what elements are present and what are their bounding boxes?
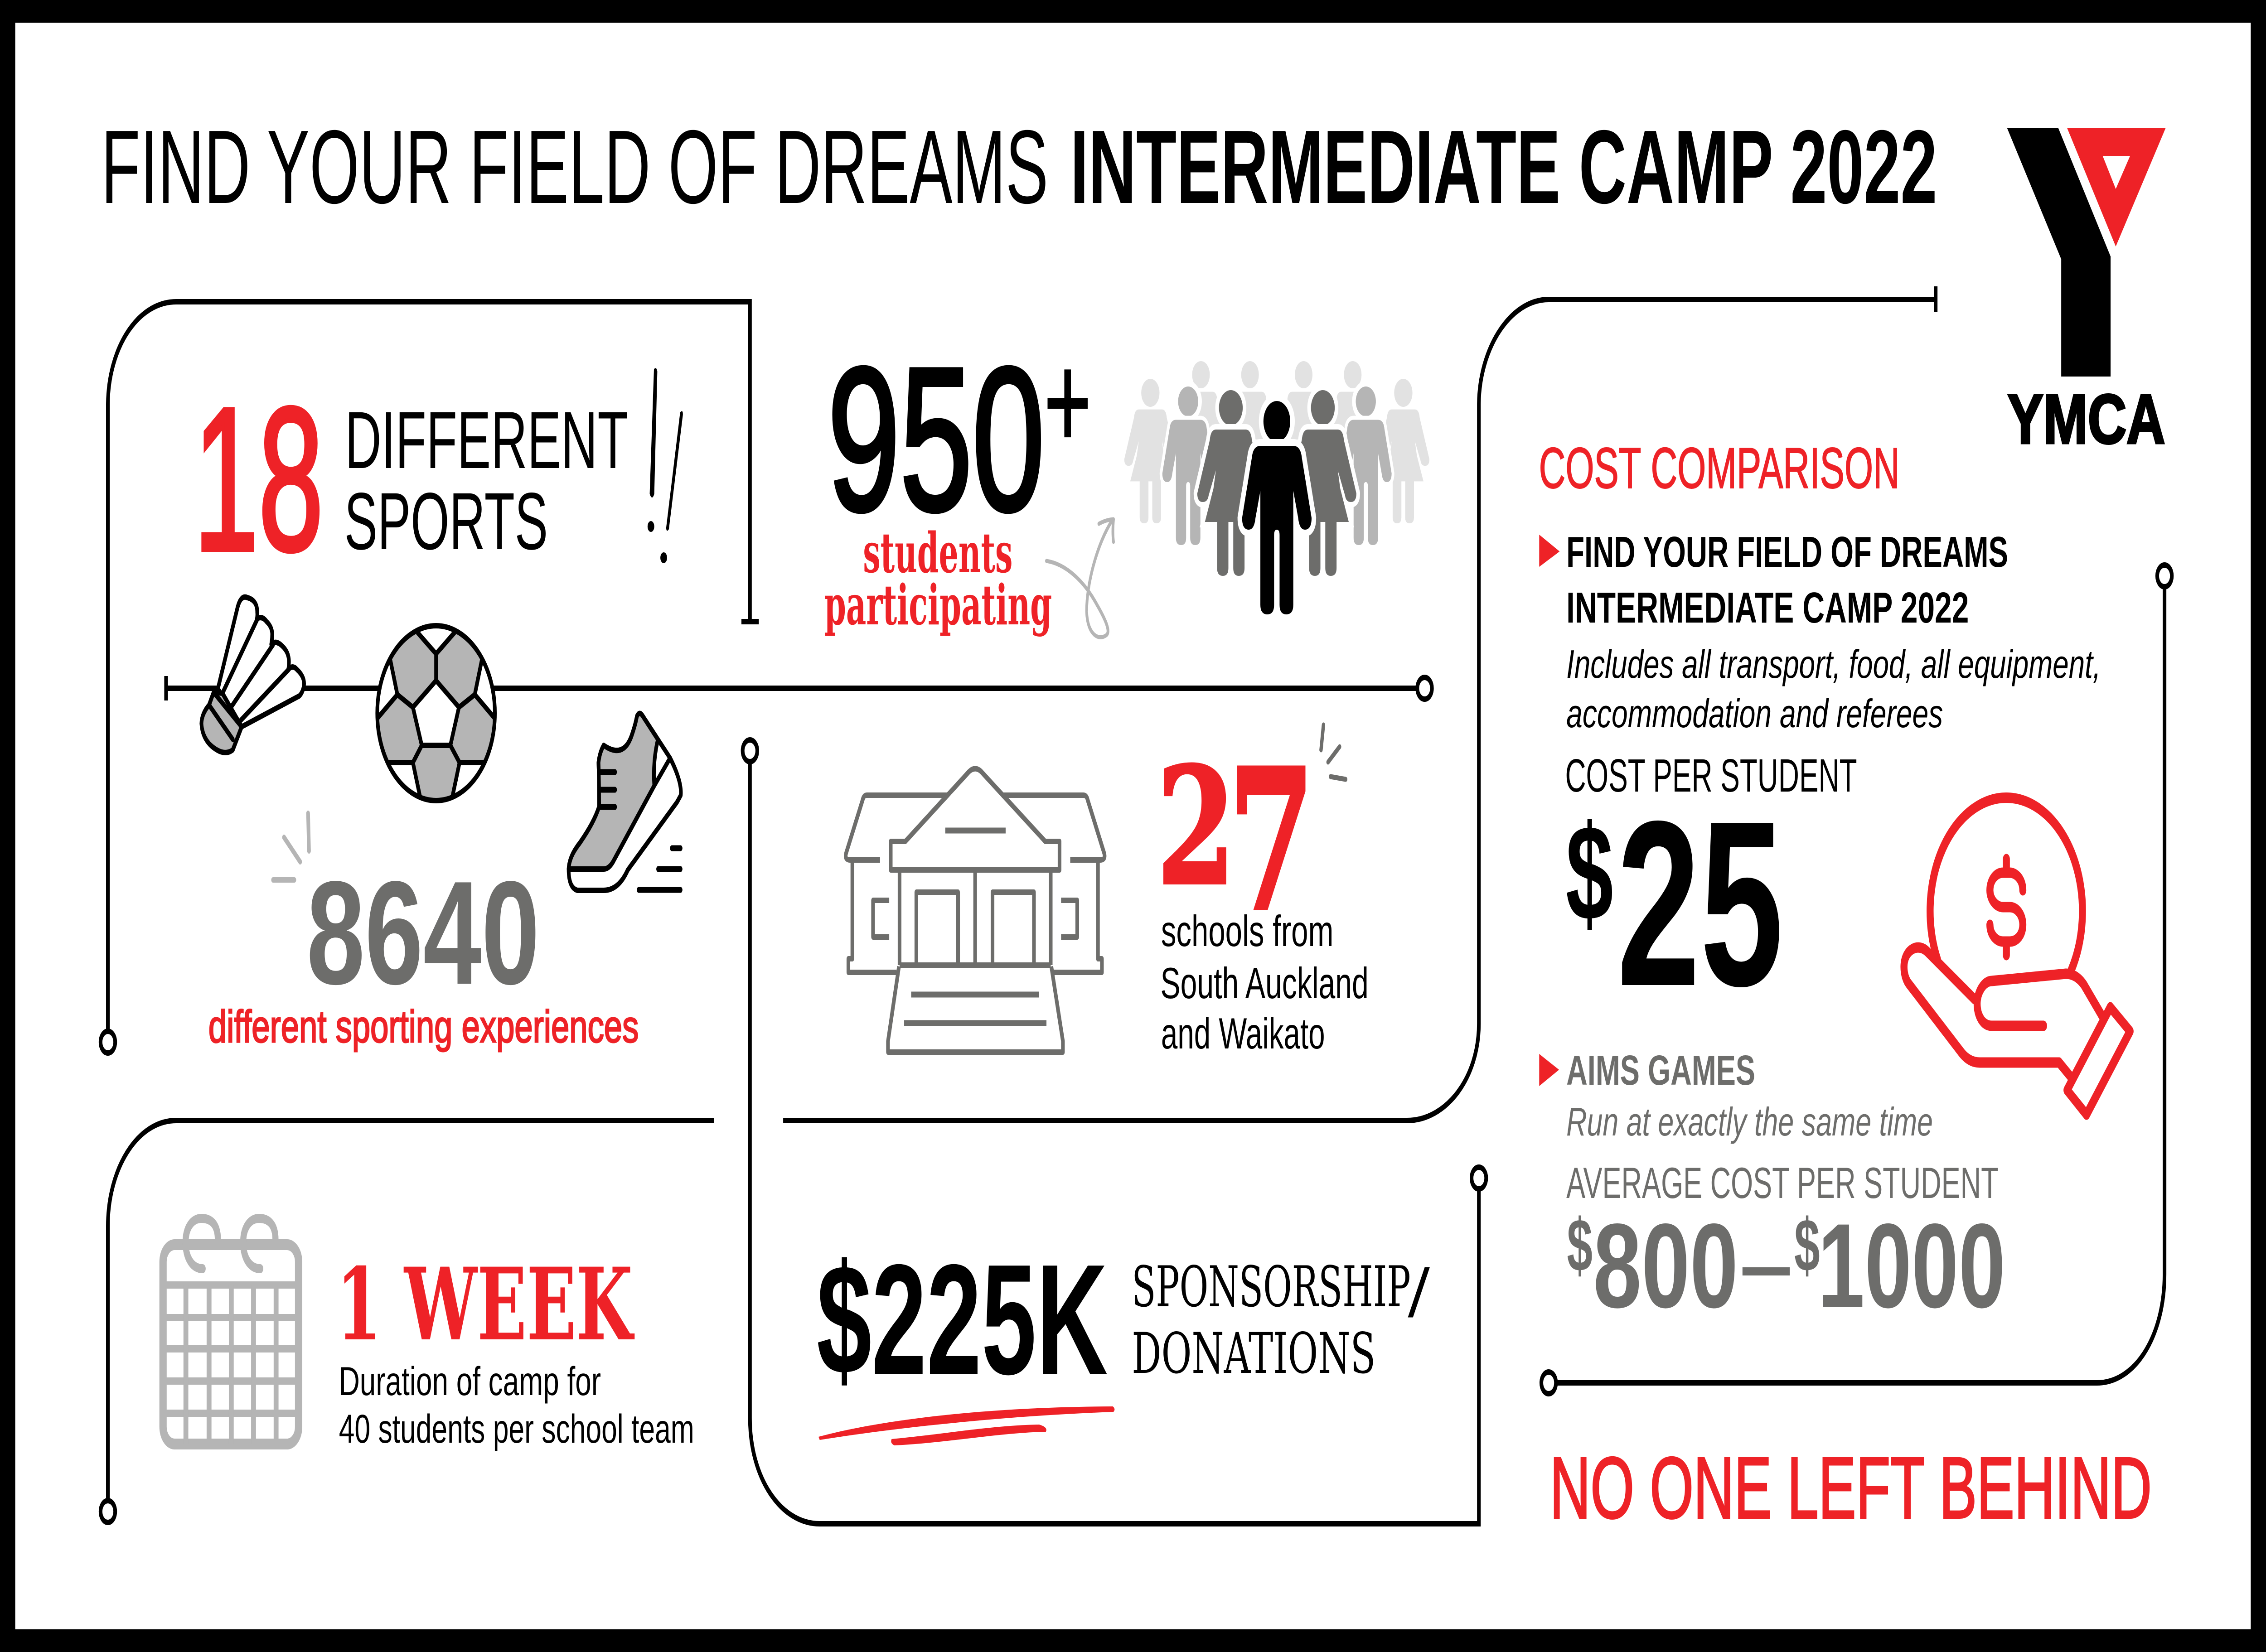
accent: red underline [818,1406,1114,1445]
stat: 1 week: Duration of camp for [339,1359,601,1404]
icon: hand drawn exclamation marks [648,368,683,563]
stat: 1 week: 40 students per school team [339,1406,694,1452]
connector: cost panel [1541,565,2172,1394]
connector: bottom left frame [101,1121,714,1522]
mid men [1162,386,1392,545]
stat: 1 week: 1 WEEK [336,1246,635,1363]
stat: 27 schools: schools from [1161,906,1333,956]
stat: 950+ students: participating [824,572,1052,638]
block: camp cost: accommodation and referees [1566,691,1943,736]
block: AIMS games cost: 1000 [1818,1199,2005,1333]
title: INTERMEDIATE CAMP 2022 [1070,108,1937,225]
stat: 27 schools: 2 [1157,733,1235,921]
icon: hand holding coin [1904,798,2130,1115]
stat: 18 different sports: SPORTS [344,476,548,567]
icon: soccer ball [375,623,497,803]
marker: red triangle [1539,535,1559,567]
block: AIMS games cost: AVERAGE COST PER STUDENT [1566,1158,1999,1208]
block: AIMS games cost: AIMS GAMES [1566,1047,1755,1094]
icon: running shoe [569,714,681,890]
block: AIMS games cost [1539,1047,2005,1333]
stat: 950+ students: students [863,520,1012,585]
dark women [1197,390,1356,576]
stat: 18 different sports: DIFFERENT [345,395,628,486]
stat: 8640 sporting experiences: different sporting experiences [208,1002,639,1052]
front man [1242,401,1312,614]
slogan: no one left behind: NO ONE LEFT BEHIND [1550,1439,2152,1536]
outer women [1124,379,1429,523]
stat: 950+ students [824,326,1091,638]
accent: sparks by 8640 [273,813,309,880]
stat: 8640 sporting experiences [208,850,639,1052]
stat: 950+ students: + [1044,326,1091,478]
stat: 27 schools: South Auckland [1161,958,1369,1008]
marker: red triangle [1539,1054,1559,1086]
stat: 18 different sports: 18 [194,366,323,593]
stat: 8640 sporting experiences: 8640 [306,850,540,1015]
label: sponsorship donations [1132,1254,1430,1386]
stat: 950+ students: 950 [828,326,1045,553]
block: AIMS games cost: $ [1567,1203,1593,1287]
icon: shuttlecock [201,597,304,753]
heading: cost comparison: COST COMPARISON [1539,436,1900,500]
connector: top left frame [101,302,759,1053]
block: camp cost [1539,528,2101,1035]
back row figures [1175,361,1379,506]
stat: 27 schools: 7 [1228,726,1315,955]
stat: 27 schools [1157,726,1369,1058]
label: sponsorship donations: / [1408,1256,1430,1327]
title: FIND YOUR FIELD OF DREAMS [101,108,1048,225]
block: camp cost: 25 [1617,772,1783,1035]
icon: calendar [163,1218,299,1444]
connector: centre bottom [743,740,1486,1524]
logo: YMCA: YMCA [2008,380,2165,458]
accent: sparks by 27 [1321,725,1346,779]
stat: 27 schools: and Waikato [1161,1009,1325,1058]
block: camp cost: FIND YOUR FIELD OF DREAMS [1566,528,2008,576]
block: camp cost: INTERMEDIATE CAMP 2022 [1566,584,1969,632]
label: sponsorship donations: DONATIONS [1132,1321,1375,1386]
icon: school building [846,768,1104,1052]
stat: 18 different sports [194,366,628,593]
block: AIMS games cost: 800 [1593,1199,1738,1333]
block: camp cost: $ [1566,797,1613,949]
stat: 1 week [336,1246,694,1452]
block: AIMS games cost: $ [1794,1203,1820,1287]
icon: crowd of people [1124,361,1429,614]
stat: $225K: $225K [817,1231,1108,1407]
title [101,108,1937,225]
connector: top right to middle [783,286,1936,1121]
logo: YMCA [2007,128,2166,458]
label: sponsorship donations: SPONSORSHIP [1132,1254,1411,1319]
connector: central horizontal [166,676,1432,700]
block: camp cost: Includes all transport, food, all equipment, [1566,642,2101,686]
arrow: grey squiggle [1046,519,1114,637]
block: camp cost: COST PER STUDENT [1565,749,1857,802]
block: AIMS games cost: Run at exactly the same time [1566,1099,1933,1144]
